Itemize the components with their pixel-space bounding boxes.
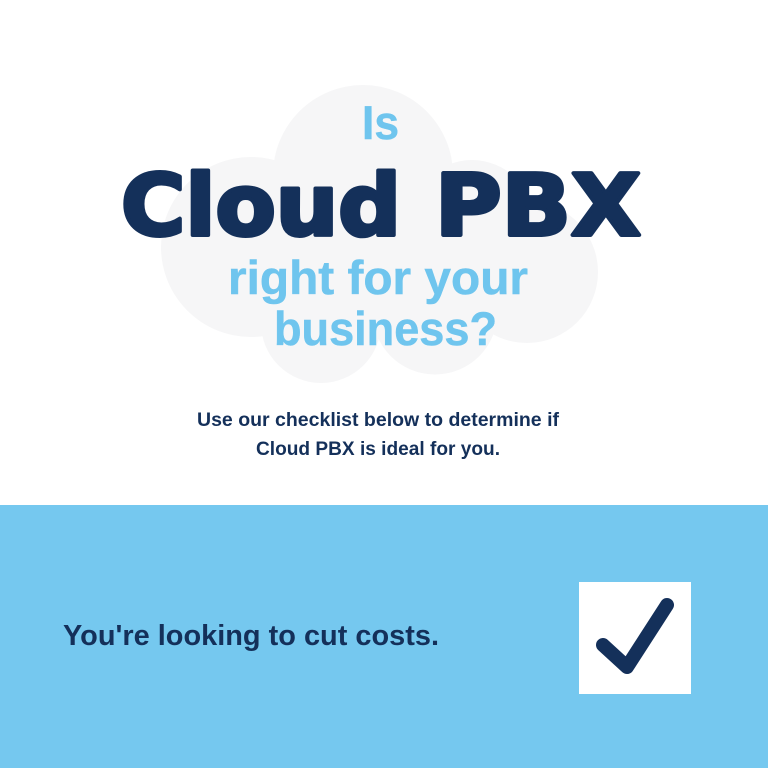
- title line: Cloud PBX: Cloud: [121, 157, 401, 256]
- title line: Cloud PBX: [121, 157, 641, 256]
- intro text: [197, 410, 560, 460]
- title line: right for your: right for your: [228, 251, 528, 304]
- icon: checkbox with check mark: [579, 582, 691, 694]
- icon: background cloud: [161, 85, 598, 383]
- panel: checklist item: [0, 505, 768, 768]
- title: [121, 96, 641, 355]
- checklist statement: You're looking to cut costs.: [63, 620, 439, 652]
- intro text: Cloud PBX is ideal for you.: [256, 439, 500, 460]
- title line: Is: Is: [362, 96, 399, 149]
- intro text: Use our checklist below to determine if: [197, 410, 560, 431]
- title line: Cloud PBX: PBX: [435, 157, 641, 256]
- title line: business?: business?: [274, 302, 497, 355]
